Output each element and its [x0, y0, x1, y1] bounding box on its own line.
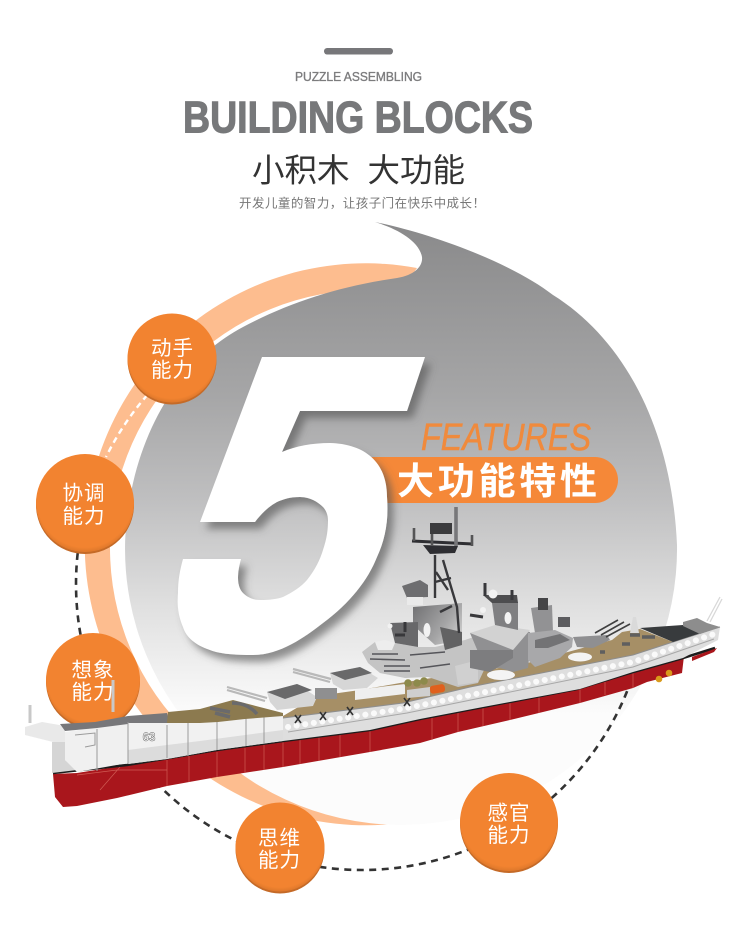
- orange node: 动手能力: [128, 314, 216, 404]
- turret B: [330, 667, 378, 690]
- orange node: 想象能力: [46, 633, 140, 729]
- second tower top: [483, 595, 518, 603]
- features label: FEATURES: [421, 417, 591, 459]
- features pill: [365, 457, 618, 503]
- orange node: 感官能力: 感官: [488, 802, 530, 825]
- chinese heading: [252, 152, 465, 188]
- mid superstructure deck: [470, 626, 530, 672]
- foredeck gray fittings: [210, 703, 257, 717]
- second tower: [492, 602, 518, 630]
- orange deck tank: [429, 684, 446, 694]
- mast crossarm: [412, 541, 473, 544]
- title: building blocks: BUILDING BLOCKS: [183, 94, 533, 142]
- radar head: [430, 523, 452, 534]
- peach ring: [85, 263, 480, 825]
- bow red sliver: [692, 648, 717, 661]
- big number 5: [178, 357, 425, 655]
- orange node: 想象能力: 想象: [72, 659, 114, 682]
- turret A: [267, 684, 317, 710]
- chinese heading: 小积木: [252, 152, 350, 188]
- stern platform: [25, 722, 65, 742]
- forward white tiers: [362, 633, 485, 687]
- olive domes: [404, 677, 428, 687]
- white tier top: [375, 640, 395, 650]
- aft gray dark band: [535, 634, 570, 648]
- dark posts: [395, 583, 512, 635]
- aft turret: [573, 635, 610, 648]
- hull panel lines: [77, 671, 633, 790]
- orange node: 想象能力: 能力: [72, 681, 114, 704]
- third tower: [531, 605, 553, 633]
- long gray box: [407, 687, 430, 698]
- dashed orbit dark: [76, 553, 628, 870]
- orange node: 思维能力: 思维: [258, 827, 301, 850]
- rail stud shadow: [288, 639, 714, 732]
- rail studs: [288, 633, 717, 727]
- aft gray block: [528, 630, 573, 667]
- white cloud ornament fore: [487, 670, 515, 680]
- bow jackstaff: [707, 597, 722, 622]
- tower left cluster: [390, 622, 418, 647]
- mid white tier: [470, 625, 530, 650]
- tower right gear: [440, 627, 462, 650]
- mast platform: [423, 545, 458, 554]
- battleship model: [25, 507, 722, 807]
- white director box: [407, 597, 423, 605]
- barbette block: [315, 688, 337, 699]
- turret B barrels: [293, 669, 331, 682]
- orange node: 感官能力: [460, 773, 558, 873]
- subheading: 开发儿童的智力，让孩子门在快乐中成长！: [239, 196, 485, 210]
- white cloud ornament aft: [568, 652, 592, 662]
- hull number 63: 63: [143, 732, 155, 744]
- rail top edge: [283, 627, 720, 718]
- white boxes row: [355, 684, 405, 700]
- white lamps: [388, 590, 512, 637]
- eyebrow: puzzle assembling: PUZZLE ASSEMBLING: [295, 70, 422, 84]
- turret A barrels: [227, 687, 267, 701]
- lower hull shading: [128, 730, 283, 764]
- white block seams: [75, 717, 264, 771]
- stern mast: [30, 680, 113, 723]
- third tower director: [538, 598, 548, 610]
- low right block: [455, 660, 478, 685]
- orange node: 思维能力: [236, 802, 324, 894]
- aft gun barrels: [595, 620, 630, 637]
- mast pole: [454, 507, 458, 546]
- brown foredeck: [167, 700, 283, 723]
- features pill text: 大功能特性: [397, 461, 597, 502]
- dashed orbit white: [106, 395, 147, 457]
- orange node: 协调能力: 能力: [62, 505, 106, 528]
- orange node: 动手能力: 动手: [151, 337, 194, 360]
- mast posts: [414, 527, 472, 546]
- bow deck: [683, 618, 720, 634]
- stern white deckhouse: [65, 723, 128, 772]
- orange node: 协调能力: 协调: [62, 482, 106, 505]
- main tower base: [413, 603, 462, 645]
- aft cone: [630, 617, 639, 633]
- orange node: 感官能力: 能力: [488, 824, 530, 847]
- anchor rings: [656, 670, 672, 682]
- chinese heading: 大功能: [368, 152, 465, 188]
- rail band: [283, 627, 720, 741]
- tower upper director: [402, 580, 428, 598]
- gray swoosh circle: [125, 222, 677, 825]
- orange node: 动手能力: 能力: [151, 359, 194, 382]
- black waterline: [53, 648, 715, 773]
- black helipad: [640, 625, 710, 642]
- mast lattice: [435, 555, 459, 633]
- rail x fittings: [295, 698, 410, 723]
- header bar: [324, 48, 393, 54]
- white hull slab: [128, 715, 283, 764]
- aft deck fittings: [600, 635, 655, 652]
- orange node: 思维能力: 能力: [258, 849, 301, 872]
- red lower hull: [53, 656, 684, 807]
- stern deck gear: [60, 713, 170, 731]
- forward tier slots: [370, 652, 450, 671]
- midship brown deck: [283, 629, 673, 718]
- stern lower hull: [52, 742, 77, 773]
- orange node: 协调能力: [36, 454, 134, 554]
- mid deck bevel: [470, 650, 513, 672]
- turret A top: [267, 684, 312, 699]
- turret B top: [330, 667, 372, 680]
- aft gear: [558, 617, 570, 627]
